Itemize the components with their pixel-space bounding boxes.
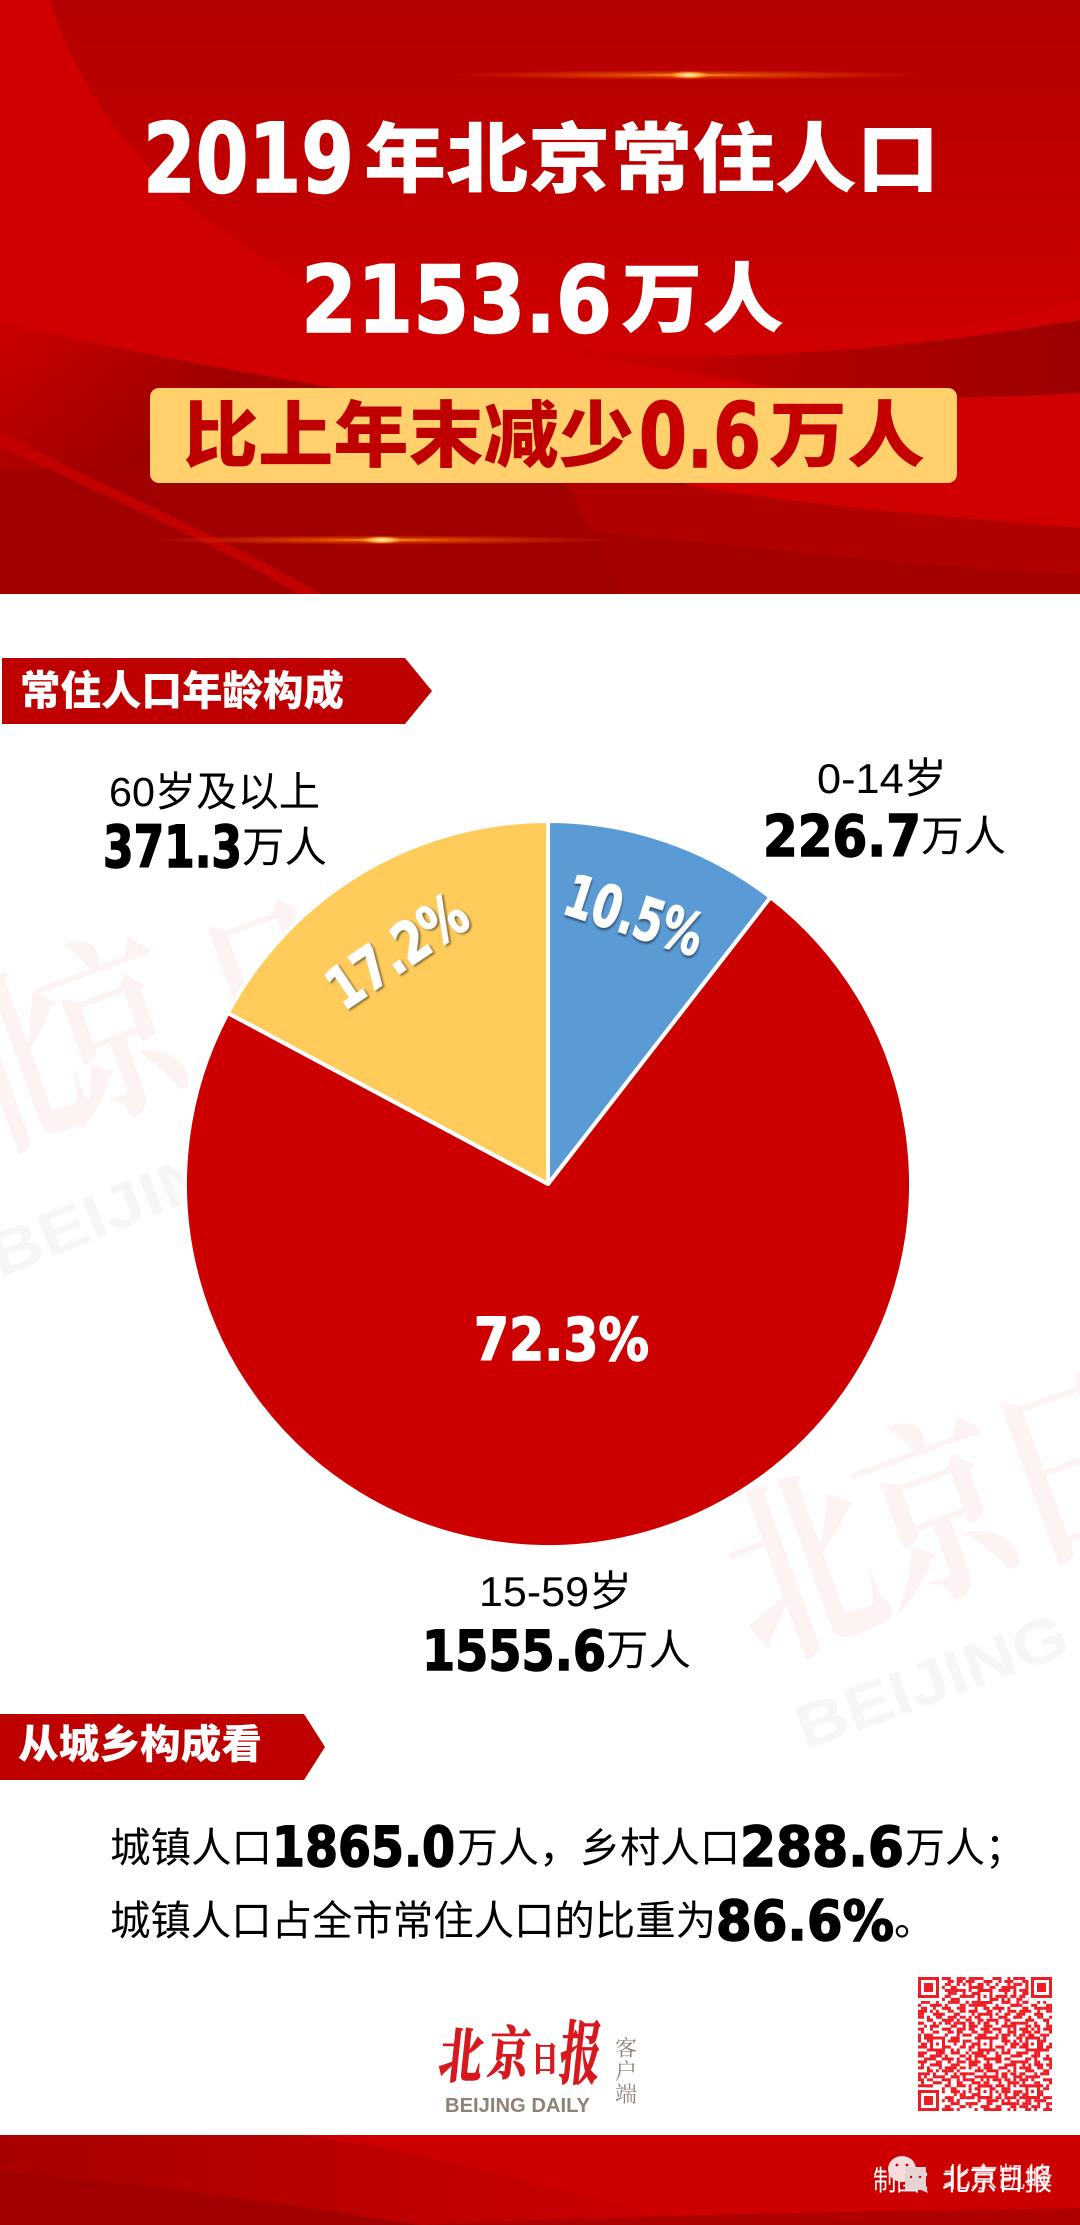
credit text: 制图： (873, 2165, 943, 2196)
header swoosh: lower right dark band (420, 519, 1080, 594)
header swoosh: lower left dark (0, 322, 700, 594)
logo calligraphy: 日 (531, 2032, 559, 2081)
body text line 2: 城镇人口占全市常住人口的比重为 (110, 1898, 716, 1944)
glow line top (449, 70, 929, 80)
watermark right: 京 (815, 1341, 1053, 1660)
pie chart: age composition (185, 821, 911, 1547)
header panel: red banner (0, 0, 1080, 594)
body text line 2 (110, 1889, 935, 1953)
label: 0-14: 万人 (921, 813, 1006, 860)
header swoosh: lower middle band (470, 440, 1080, 594)
value: 17.2%: 17.2% (313, 880, 481, 1023)
body text line 1: 城镇人口 (110, 1825, 272, 1871)
body text line 1: 乡村人口 (580, 1825, 740, 1871)
section tag: age composition: 常住人口年龄构成 (20, 657, 344, 717)
slice: 60+ yellow (228, 821, 548, 1184)
label: 60 and over: 60岁及以上 (109, 769, 320, 815)
logo side text: 户 (615, 2055, 637, 2086)
header base colour (0, 0, 1080, 594)
title line 1 (143, 98, 939, 215)
glow hot spot top (667, 71, 711, 79)
logo calligraphy (435, 2000, 606, 2099)
body text line 1: 1865.0 (272, 1815, 455, 1879)
title line 2 (301, 238, 784, 354)
body text line 1: 万人， (457, 1825, 580, 1871)
logo wordmark: BEIJING DAILY (445, 2095, 591, 2117)
label: 0-14: 226.7 (763, 804, 921, 870)
callout: change versus last year: 比上年末减少 (183, 377, 634, 482)
title line 1: 2019 (143, 103, 354, 215)
footer swoosh: bottom left (0, 2172, 420, 2225)
logo side text: 端 (615, 2078, 637, 2109)
glow line bottom (142, 535, 622, 545)
callout: change versus last year: 万人 (769, 377, 925, 482)
watermark right: BEIJING (786, 1601, 1078, 1763)
title line 2: 万人 (621, 238, 784, 348)
footer swoosh: top left (0, 2135, 700, 2225)
logo calligraphy: 报 (556, 2000, 606, 2099)
watermark right: 北 (679, 1396, 916, 1714)
QR code (918, 1977, 1052, 2111)
body text line 1 (110, 1815, 1025, 1879)
watermark right (679, 1297, 1080, 1763)
slice: 0-14 blue (548, 821, 770, 1184)
title line 1: 年北京常住人口 (364, 98, 939, 208)
footer swoosh: bottom right (420, 2208, 1080, 2225)
label: 60 and over: 371.3 (103, 813, 242, 881)
label: 15-59: 万人 (606, 1627, 691, 1674)
label: 15-59 (422, 1568, 691, 1683)
footer panel (0, 2135, 1080, 2225)
glow hot spot bottom (360, 536, 404, 544)
label: 60 and over: 万人 (242, 824, 327, 871)
label: 0-14 (763, 755, 1006, 870)
title line 2: 2153.6 (301, 246, 612, 354)
credit name: 北京日报 (942, 2164, 1052, 2197)
callout: change versus last year (150, 377, 957, 489)
watermark left (0, 824, 382, 1291)
value: 72.3%: 72.3% (474, 1305, 649, 1374)
icon: WeChat bubbles (888, 2156, 928, 2193)
logo calligraphy: 京 (485, 2009, 535, 2091)
body text line 2: 。 (894, 1898, 935, 1944)
header swoosh: top dark (50, 0, 1080, 355)
body text line 2: 86.6% (716, 1889, 894, 1953)
header swoosh: light streak (0, 432, 320, 594)
value: 10.5%: 10.5% (556, 861, 712, 970)
watermark left: 京 (0, 862, 221, 1175)
header swoosh: lower left fill (0, 470, 620, 594)
logo calligraphy: 北 (435, 2010, 488, 2095)
logo side text: 客 (615, 2032, 637, 2063)
label: 0-14: 0-14岁 (817, 755, 947, 802)
section tag: age composition (2, 657, 432, 724)
WeChat account name: 北京凯峰 (943, 2162, 1053, 2193)
header swoosh: right wedge (540, 320, 1080, 398)
logo side text (615, 2032, 637, 2109)
slice: 15-59 red (185, 897, 911, 1547)
section tag: urban and rural: 从城乡构成看 (18, 1712, 262, 1770)
watermark left: 日 (160, 824, 382, 1137)
logo: Beijing Daily (435, 2000, 637, 2117)
footer credit: maker line with WeChat watermark (873, 2156, 1053, 2197)
label: 60 and over (103, 769, 327, 881)
body text line 1: 288.6 (740, 1815, 904, 1879)
callout: change versus last year: 0.6 (639, 384, 761, 489)
label: 15-59: 15-59岁 (479, 1568, 632, 1615)
section tag: urban and rural (0, 1712, 325, 1780)
label: 15-59: 1555.6 (422, 1619, 606, 1683)
body text line 1: 万人； (905, 1825, 1025, 1871)
